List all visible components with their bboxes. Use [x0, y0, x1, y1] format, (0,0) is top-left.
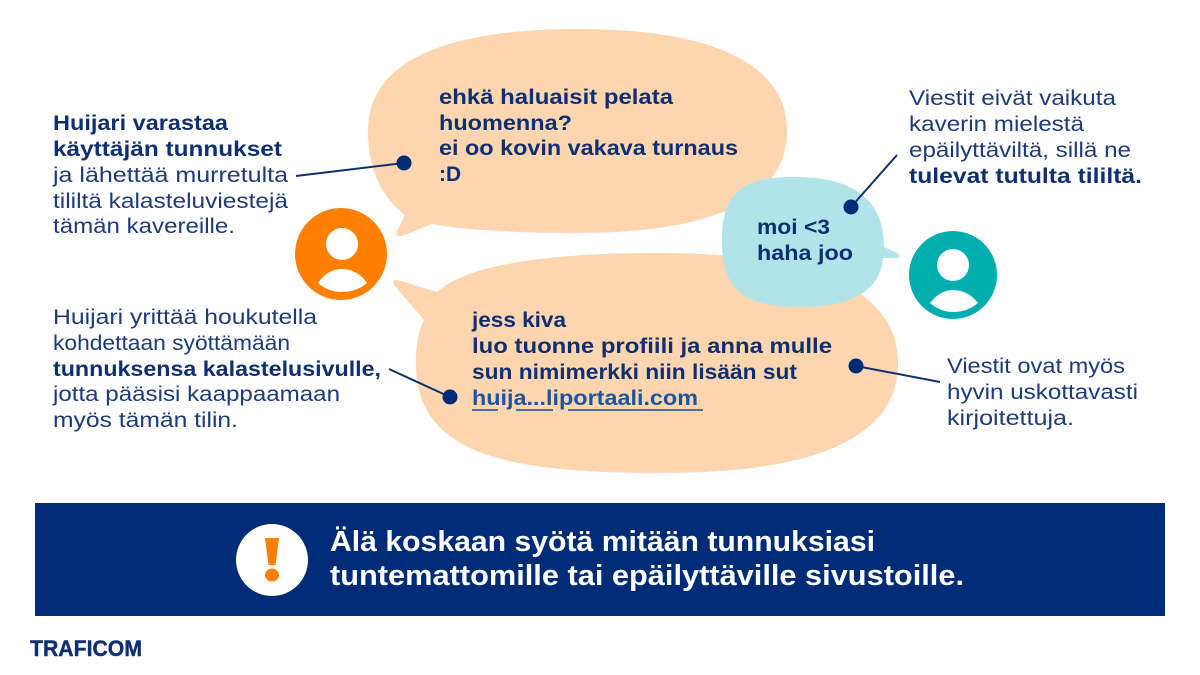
callout: stolen credentials: tämän kavereille. — [53, 214, 235, 238]
speech bubble: lower scammer message with link: luo tuonne profiili ja anna mulle — [472, 334, 832, 358]
speech bubble: friend reply: moi <3 — [757, 215, 830, 239]
callout: messages do not look suspicious: epäilyttäviltä, sillä ne — [909, 138, 1131, 162]
speech bubble: upper scammer message: ehkä haluaisit pelata — [439, 85, 674, 109]
callout: believable messages — [947, 354, 1138, 430]
warning banner: Älä koskaan syötä mitään tunnuksiasi — [330, 526, 875, 558]
connector: friend bubble callout — [844, 155, 897, 214]
callout: phishing page: tunnuksensa kalastelusivulle, — [53, 357, 381, 381]
speech bubble: lower scammer message with link: sun nimimerkki niin lisään sut — [472, 360, 797, 384]
callout: phishing page: jotta pääsisi kaappaamaan — [52, 382, 340, 406]
callout: stolen credentials: ja lähettää murretulta — [52, 163, 288, 187]
logo: Traficom: TRAFICOM — [30, 636, 142, 661]
speech bubble: upper scammer message: :D — [439, 162, 461, 186]
connector: phishing callout to link — [389, 369, 458, 404]
callout: phishing page: myös tämän tilin. — [53, 408, 238, 432]
callout: phishing page: Huijari yrittää houkutella — [53, 305, 317, 329]
callout: believable messages: hyvin uskottavasti — [947, 380, 1138, 404]
speech bubble: upper scammer message — [368, 29, 787, 236]
callout: messages do not look suspicious: tulevat tutulta tililtä. — [909, 164, 1142, 188]
callout: stolen credentials: tililtä kalasteluviestejä — [53, 189, 288, 213]
callout: believable messages: Viestit ovat myös — [947, 354, 1125, 378]
speech bubble: upper scammer message: huomenna? — [439, 111, 572, 135]
connector: believable callout to lower bubble — [848, 358, 940, 382]
icon: exclamation mark — [236, 524, 308, 596]
speech bubble: friend reply: haha joo — [757, 241, 853, 265]
callout: messages do not look suspicious: Viestit eivät vaikuta — [909, 86, 1116, 110]
icon: friend avatar — [909, 231, 997, 319]
speech bubble: friend reply — [722, 177, 900, 307]
speech bubble: lower scammer message with link — [393, 253, 898, 473]
callout: stolen credentials: käyttäjän tunnukset — [53, 137, 282, 161]
callout: phishing page — [52, 305, 381, 432]
speech bubble: lower scammer message with link: huija...liportaali.com — [472, 386, 698, 410]
warning banner: tuntemattomille tai epäilyttäville sivustoille. — [330, 560, 964, 592]
callout: messages do not look suspicious — [909, 86, 1142, 188]
speech bubble: upper scammer message: ei oo kovin vakava turnaus — [439, 136, 738, 160]
callout: believable messages: kirjoitettuja. — [947, 406, 1074, 430]
callout: messages do not look suspicious: kaverin mielestä — [909, 112, 1084, 136]
callout: stolen credentials — [52, 111, 288, 238]
warning banner — [35, 503, 1165, 616]
connector: credentials callout to upper bubble — [296, 156, 412, 176]
icon: scammer avatar — [295, 208, 387, 300]
speech bubble: lower scammer message with link: jess kiva — [471, 308, 567, 332]
callout: phishing page: kohdettaan syöttämään — [53, 331, 290, 355]
callout: stolen credentials: Huijari varastaa — [53, 111, 229, 135]
